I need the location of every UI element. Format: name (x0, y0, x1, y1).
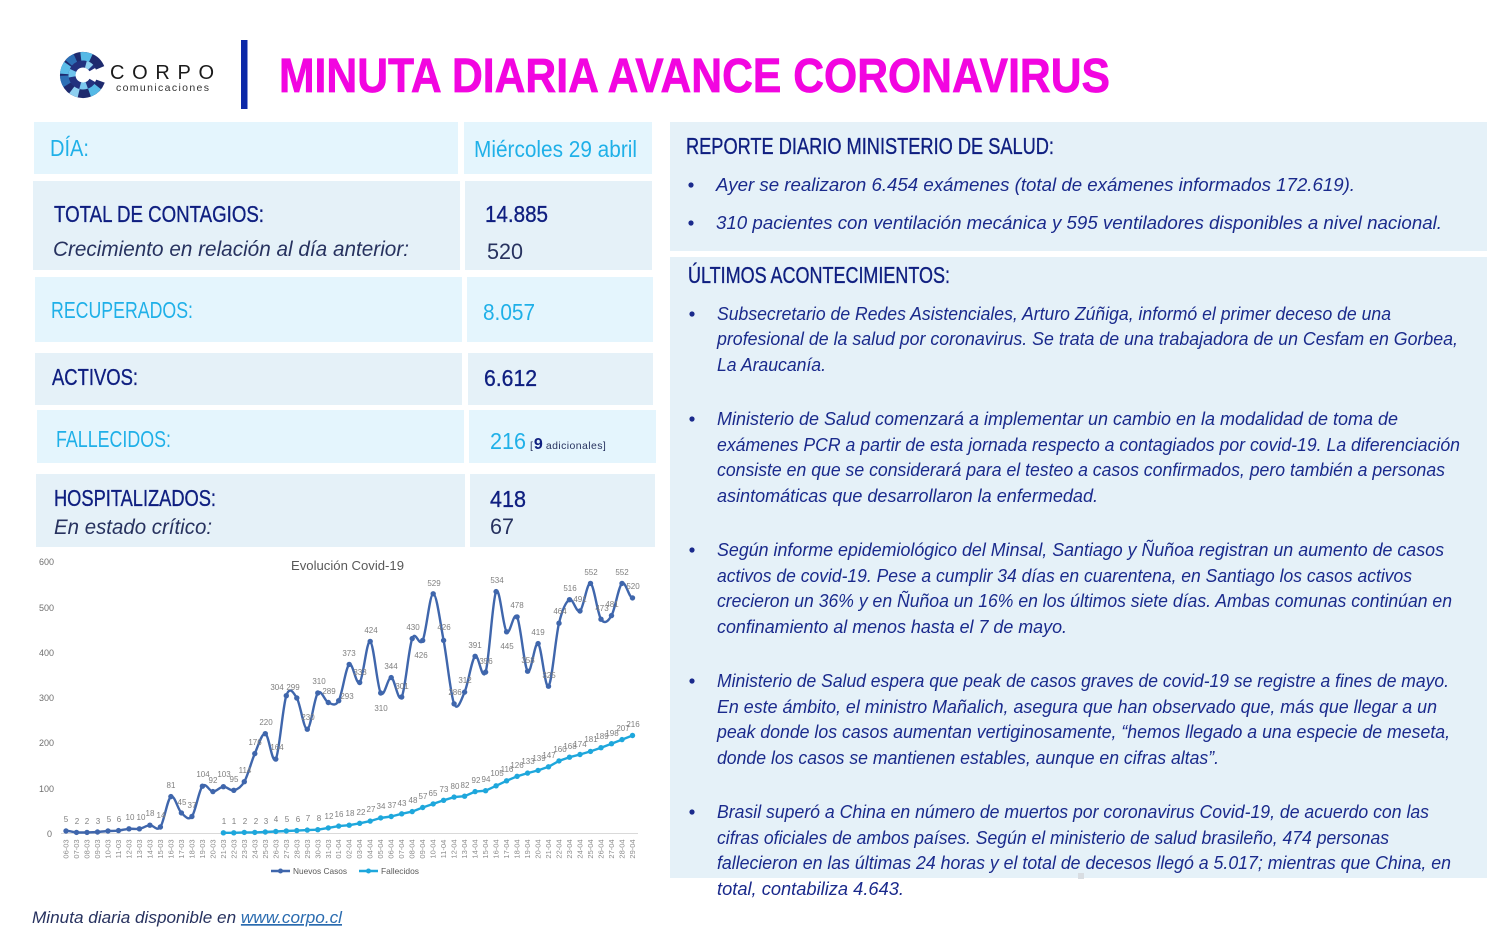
data labels: fallecidos: 1 (222, 817, 227, 826)
data labels: fallecidos: 189 (595, 732, 609, 741)
label: estado crítico: En estado crítico: (54, 516, 212, 539)
data labels: nuevos casos: 310 (374, 704, 388, 713)
x axis date labels: 22-03 (229, 839, 238, 859)
data labels: fallecidos: 82 (461, 781, 470, 790)
y axis labels: 300 (39, 693, 54, 703)
data labels: nuevos casos: 299 (286, 683, 300, 692)
data labels: fallecidos: 4 (274, 815, 279, 824)
data labels: nuevos casos: 520 (626, 582, 640, 591)
x axis date labels: 23-04 (565, 839, 574, 859)
data labels: nuevos casos: 481 (605, 600, 619, 609)
data labels: nuevos casos: 310 (312, 677, 326, 686)
x axis date labels: 09-04 (418, 839, 427, 859)
x axis date labels: 21-04 (544, 839, 553, 859)
logo: Corpo Comunicaciones: comunicaciones (116, 82, 209, 94)
bullet: exámenes: Ayer se realizaron 6.454 exámenes (total de exámenes informados 172.619). (715, 174, 1355, 195)
data labels: nuevos casos: 164 (270, 743, 284, 752)
data labels: fallecidos: 168 (563, 742, 577, 751)
x axis date labels: 23-03 (240, 839, 249, 859)
data labels: nuevos casos: 220 (259, 718, 273, 727)
data labels: nuevos casos: 10 (137, 813, 146, 822)
x axis date labels: 10-04 (429, 839, 438, 859)
data labels: fallecidos: 92 (472, 776, 481, 785)
legend: nuevos casos (271, 866, 347, 876)
value: activos: 6.612 (484, 365, 537, 391)
data labels: fallecidos: 27 (367, 805, 376, 814)
logo: Corpo Comunicaciones (57, 49, 214, 101)
news item: Brasil y China: total, contabiliza 4.643. (717, 878, 904, 899)
data labels: nuevos casos: 552 (615, 568, 629, 577)
data labels: nuevos casos: 325 (542, 671, 556, 680)
news item: peak de casos graves: peak donde los casos aumentan vertiginosamente, “hemos llegado a una especie de meseta, (716, 721, 1450, 742)
data labels: fallecidos: 7 (306, 814, 311, 823)
x axis date labels: 16-04 (492, 839, 501, 859)
data labels: nuevos casos (64, 568, 640, 826)
x axis date labels: 27-03 (282, 839, 291, 859)
label: recuperados: RECUPERADOS: (51, 297, 193, 323)
data labels: fallecidos: 1 (232, 817, 237, 826)
data labels: fallecidos: 48 (409, 796, 418, 805)
data labels: fallecidos: 34 (377, 802, 386, 811)
value: recuperados: 8.057 (483, 299, 535, 325)
value: crecimiento: 520 (487, 239, 523, 264)
data labels: nuevos casos: 230 (301, 713, 315, 722)
heading: reporte diario: REPORTE DIARIO MINISTERIO DE SALUD: (686, 133, 1054, 159)
x axis date labels: 05-04 (376, 839, 385, 859)
news item: informe epidemiológico: confinamiento al menos hasta el 7 de mayo. (717, 616, 1067, 637)
data labels: fallecidos (222, 720, 640, 826)
data labels: nuevos casos: 5 (107, 815, 112, 824)
data labels: nuevos casos: 301 (395, 682, 409, 691)
x axis date labels: 26-03 (271, 839, 280, 859)
news item: exámenes PCR (689, 408, 1460, 506)
data labels: nuevos casos: 176 (248, 738, 262, 747)
data labels: nuevos casos: 529 (427, 579, 441, 588)
x axis date labels: 29-04 (628, 839, 637, 859)
series: fallecidos line (223, 736, 632, 833)
data labels: fallecidos: 174 (573, 740, 587, 749)
y axis labels: 0 (47, 829, 52, 839)
data labels: fallecidos: 147 (542, 751, 556, 760)
news item: primer deceso: La Araucanía. (717, 354, 826, 375)
x axis date labels: 12-03 (124, 839, 134, 859)
data labels: fallecidos: 198 (605, 729, 619, 738)
note: adicionales: [9 adicionales] (530, 436, 606, 453)
line chart: evolución covid-19 (39, 557, 640, 876)
data labels: nuevos casos: 430 (406, 623, 420, 632)
x axis date labels (62, 839, 637, 859)
x axis date labels: 02-04 (345, 839, 354, 859)
data labels: nuevos casos: 426 (437, 623, 451, 632)
panel: fallecidos (37, 410, 656, 463)
y axis labels (39, 557, 54, 839)
x axis date labels: 25-03 (261, 839, 270, 859)
x axis date labels: 18-03 (187, 839, 196, 859)
label: hospitalizados: HOSPITALIZADOS: (54, 485, 216, 511)
data labels: nuevos casos: 419 (531, 628, 545, 637)
data labels: fallecidos: 18 (346, 809, 355, 818)
data labels: fallecidos: 2 (243, 817, 248, 826)
data labels: nuevos casos: 445 (500, 642, 514, 651)
data labels: fallecidos: 22 (357, 808, 366, 817)
panel: total de contagios (33, 181, 652, 270)
series: nuevos casos line (66, 583, 632, 833)
data labels: nuevos casos: 426 (414, 651, 428, 660)
x axis date labels: 10-03 (104, 839, 112, 859)
news item: Brasil y China: cifras oficiales de ambos países. Según el ministerio de salud brasileño, 474 personas (717, 827, 1389, 848)
data labels: fallecidos: 207 (616, 724, 630, 733)
x axis date labels: 31-03 (324, 839, 333, 859)
data labels: nuevos casos: 5 (64, 815, 69, 824)
data labels: nuevos casos: 6 (117, 815, 122, 824)
data labels: nuevos casos: 45 (178, 798, 187, 807)
x axis date labels: 06-03 (62, 839, 70, 859)
data labels: nuevos casos: 2 (75, 817, 80, 826)
data labels: fallecidos: 16 (335, 810, 344, 819)
data labels: nuevos casos: 356 (479, 657, 493, 666)
data labels: nuevos casos: 289 (322, 687, 336, 696)
x axis date labels: 13-03 (135, 839, 144, 859)
y axis labels: 200 (39, 738, 54, 748)
news item: peak de casos graves: Ministerio de Salud espera que peak de casos graves de covid-19 se registre a fines de mayo. (717, 670, 1449, 691)
data labels: fallecidos: 65 (429, 789, 438, 798)
label: fallecidos: FALLECIDOS: (56, 426, 171, 452)
x axis date labels: 17-04 (502, 839, 511, 859)
data labels: nuevos casos: 358 (521, 656, 535, 665)
label: crecimiento: Crecimiento en relación al día anterior: (53, 238, 409, 261)
legend: fallecidos: Fallecidos (381, 866, 419, 876)
x axis date labels: 18-04 (513, 839, 522, 859)
news item: peak de casos graves: donde los casos se mantienen estables, aunque en cifras altas”. (717, 747, 1219, 768)
news item: Brasil y China (689, 801, 1451, 899)
data labels: fallecidos: 2 (254, 817, 259, 826)
x axis date labels: 04-04 (366, 839, 375, 859)
x axis date labels: 25-04 (586, 839, 595, 859)
x axis date labels: 08-04 (408, 839, 417, 859)
x axis date labels: 30-03 (313, 839, 322, 859)
data labels: fallecidos: 133 (521, 757, 535, 766)
data labels: nuevos casos: 104 (196, 770, 210, 779)
news item: exámenes PCR: consiste en que se considerará para el testeo a casos confirmados, pero también a personas (717, 459, 1445, 480)
news item: primer deceso (689, 303, 1458, 375)
news item: peak de casos graves (689, 670, 1450, 768)
data labels: fallecidos: 37 (388, 801, 397, 810)
panel: recuperados (35, 277, 653, 342)
header divider bar (241, 40, 248, 109)
news item: informe epidemiológico: activos de covid-19. Pese a cumplir 34 días en cuarentena, en Santiago los casos activos (717, 565, 1412, 586)
x axis date labels: 19-04 (523, 839, 532, 859)
x axis date labels: 15-04 (481, 839, 490, 859)
x axis date labels: 15-03 (156, 839, 165, 859)
label: total de contagios: TOTAL DE CONTAGIOS: (54, 201, 264, 227)
data labels: nuevos casos: 491 (573, 595, 587, 604)
x axis date labels: 01-04 (334, 839, 343, 859)
data labels: nuevos casos: 14 (157, 811, 166, 820)
x axis date labels: 28-03 (292, 839, 301, 859)
data labels: nuevos casos: 103 (217, 770, 231, 779)
data labels: nuevos casos: 534 (490, 576, 504, 585)
data labels: fallecidos: 139 (532, 754, 546, 763)
series: nuevos casos markers (63, 581, 635, 835)
y axis labels: 600 (39, 557, 54, 567)
data labels: fallecidos: 5 (285, 815, 290, 824)
data labels: fallecidos: 160 (553, 745, 567, 754)
data labels: nuevos casos: 286 (448, 688, 462, 697)
news item: informe epidemiológico: Según informe epidemiológico del Minsal, Santiago y Ñuñoa registran un aumento de casos (717, 539, 1444, 560)
x axis date labels: 11-03 (114, 840, 123, 858)
panel: día (34, 122, 652, 174)
news item: primer deceso: profesional de la salud por coronavirus. Se trata de una trabajadora de un Cesfam en Gorbea, (716, 328, 1458, 349)
x axis date labels: 12-04 (450, 839, 459, 859)
data labels: nuevos casos: 293 (340, 692, 354, 701)
value: date: Miércoles 29 abril (474, 136, 637, 162)
data labels: fallecidos: 94 (482, 775, 491, 784)
data labels: fallecidos: 8 (317, 814, 322, 823)
news item: peak de casos graves: En este ámbito, el ministro Mañalich, asegura que han observado que, más que llegar a un (717, 696, 1437, 717)
news item: exámenes PCR: Ministerio de Salud comenzará a implementar un cambio en la modalidad de toma de (717, 408, 1398, 429)
data labels: fallecidos: 80 (451, 782, 460, 791)
data labels: fallecidos: 3 (264, 817, 269, 826)
news item: informe epidemiológico: crecieron un 36% y en Ñuñoa un 16% en los últimos siete días. Ambas comunas continúan en (717, 590, 1452, 611)
value: estado crítico: 67 (490, 514, 514, 539)
x axis date labels: 13-04 (460, 839, 469, 859)
x axis date labels: 26-04 (596, 839, 606, 859)
panel: activos (35, 353, 653, 405)
panel: reporte diario ministerio de salud (670, 122, 1487, 251)
data labels: nuevos casos: 10 (126, 813, 135, 822)
x axis date labels: 22-04 (554, 839, 564, 859)
data labels: nuevos casos: 424 (364, 626, 378, 635)
data labels: nuevos casos: 3 (96, 817, 101, 826)
label: día: DÍA: (50, 135, 89, 161)
data labels: nuevos casos: 18 (146, 809, 155, 818)
data labels: nuevos casos: 92 (209, 776, 218, 785)
x axis date labels: 24-03 (250, 839, 259, 859)
heading: últimos acontecimientos: ÚLTIMOS ACONTECIMIENTOS: (688, 262, 950, 288)
data labels: nuevos casos: 516 (563, 584, 577, 593)
data labels: nuevos casos: 344 (384, 662, 398, 671)
data labels: nuevos casos: 312 (458, 676, 472, 685)
news item: Brasil y China: fallecieron en las últimas 24 horas y el total de decesos llegó a 5.017; mientras que China, en (717, 852, 1451, 873)
chart title: Evolución Covid-19 (291, 558, 404, 573)
x axis date labels: 11-04 (439, 840, 448, 858)
data labels: nuevos casos: 114 (239, 766, 252, 775)
data labels: fallecidos: 216 (626, 720, 640, 729)
x axis date labels: 27-04 (607, 839, 616, 859)
value: fallecidos: 216 (490, 428, 526, 454)
x axis date labels: 06-04 (387, 839, 396, 859)
news item: primer deceso: Subsecretario de Redes Asistenciales, Arturo Zúñiga, informó el primer deceso de una (717, 303, 1391, 324)
data labels: nuevos casos: 473 (595, 604, 609, 613)
title: MINUTA DIARIA AVANCE CORONAVIRUS (279, 50, 1110, 103)
data labels: fallecidos: 12 (325, 812, 334, 821)
y axis labels: 100 (39, 784, 54, 794)
x axis date labels: 17-03 (177, 839, 186, 859)
x axis date labels: 14-04 (471, 839, 480, 859)
x axis date labels: 07-03 (72, 839, 81, 859)
data labels: fallecidos: 57 (419, 792, 428, 801)
data labels: nuevos casos: 373 (342, 649, 356, 658)
news item: informe epidemiológico (689, 539, 1452, 637)
data labels: fallecidos: 6 (296, 815, 301, 824)
x axis date labels: 20-04 (534, 839, 543, 859)
y axis labels: 500 (39, 603, 54, 613)
data labels: nuevos casos: 333 (353, 668, 367, 677)
x axis date labels: 24-04 (576, 839, 584, 859)
value: total contagios: 14.885 (485, 201, 548, 227)
x axis date labels: 21-03 (219, 839, 228, 859)
series: fallecidos markers (221, 733, 635, 836)
data labels: nuevos casos: 95 (230, 775, 239, 784)
footer note: Minuta diaria disponible en www.corpo.cl (32, 908, 343, 927)
data labels: nuevos casos: 81 (167, 781, 176, 790)
bullet: ventilación: 310 pacientes con ventilación mecánica y 595 ventiladores disponibles a nivel nacional. (716, 212, 1442, 233)
x axis date labels: 19-03 (198, 839, 207, 859)
x axis date labels: 07-04 (397, 839, 406, 859)
news item: exámenes PCR: exámenes PCR a partir de esta jornada respecto a contagiados por covid-19. La diferenciación (717, 434, 1460, 455)
data labels: fallecidos: 116 (501, 765, 514, 774)
legend: fallecidos (359, 866, 419, 876)
data labels: fallecidos: 73 (440, 785, 449, 794)
data labels: nuevos casos: 391 (468, 641, 482, 650)
data labels: nuevos casos: 304 (270, 683, 284, 692)
x axis date labels: 16-03 (166, 839, 175, 859)
panel: hospitalizados (36, 474, 655, 547)
panel: últimos acontecimientos (670, 257, 1487, 899)
data labels: nuevos casos: 552 (584, 568, 598, 577)
data labels: fallecidos: 43 (398, 799, 407, 808)
logo: Corpo Comunicaciones: CORPO (110, 62, 214, 84)
data labels: nuevos casos: 464 (553, 607, 567, 616)
news item: exámenes PCR: asintomáticas que desarrollaron la enfermedad. (717, 485, 1098, 506)
x axis date labels: 09-03 (93, 839, 102, 859)
x axis date labels: 14-03 (145, 839, 154, 859)
label: activos: ACTIVOS: (52, 364, 138, 390)
data labels: fallecidos: 105 (490, 769, 504, 778)
legend: nuevos casos: Nuevos Casos (293, 866, 347, 876)
x axis date labels: 29-03 (303, 839, 312, 859)
value: hospitalizados: 418 (490, 486, 526, 512)
data labels: nuevos casos: 37 (188, 801, 197, 810)
data labels: nuevos casos: 478 (510, 601, 524, 610)
x axis date labels: 03-04 (355, 839, 364, 859)
x axis date labels: 20-03 (208, 839, 217, 859)
x axis date labels: 28-04 (618, 839, 626, 859)
data labels: nuevos casos: 2 (85, 817, 90, 826)
data labels: fallecidos: 181 (584, 735, 598, 744)
news item: Brasil y China: Brasil superó a China en número de muertos por coronavirus Covid-19, de acuerdo con las (717, 801, 1429, 822)
data labels: fallecidos: 126 (510, 761, 524, 770)
x axis date labels: 08-03 (82, 839, 92, 859)
y axis labels: 400 (39, 648, 54, 658)
